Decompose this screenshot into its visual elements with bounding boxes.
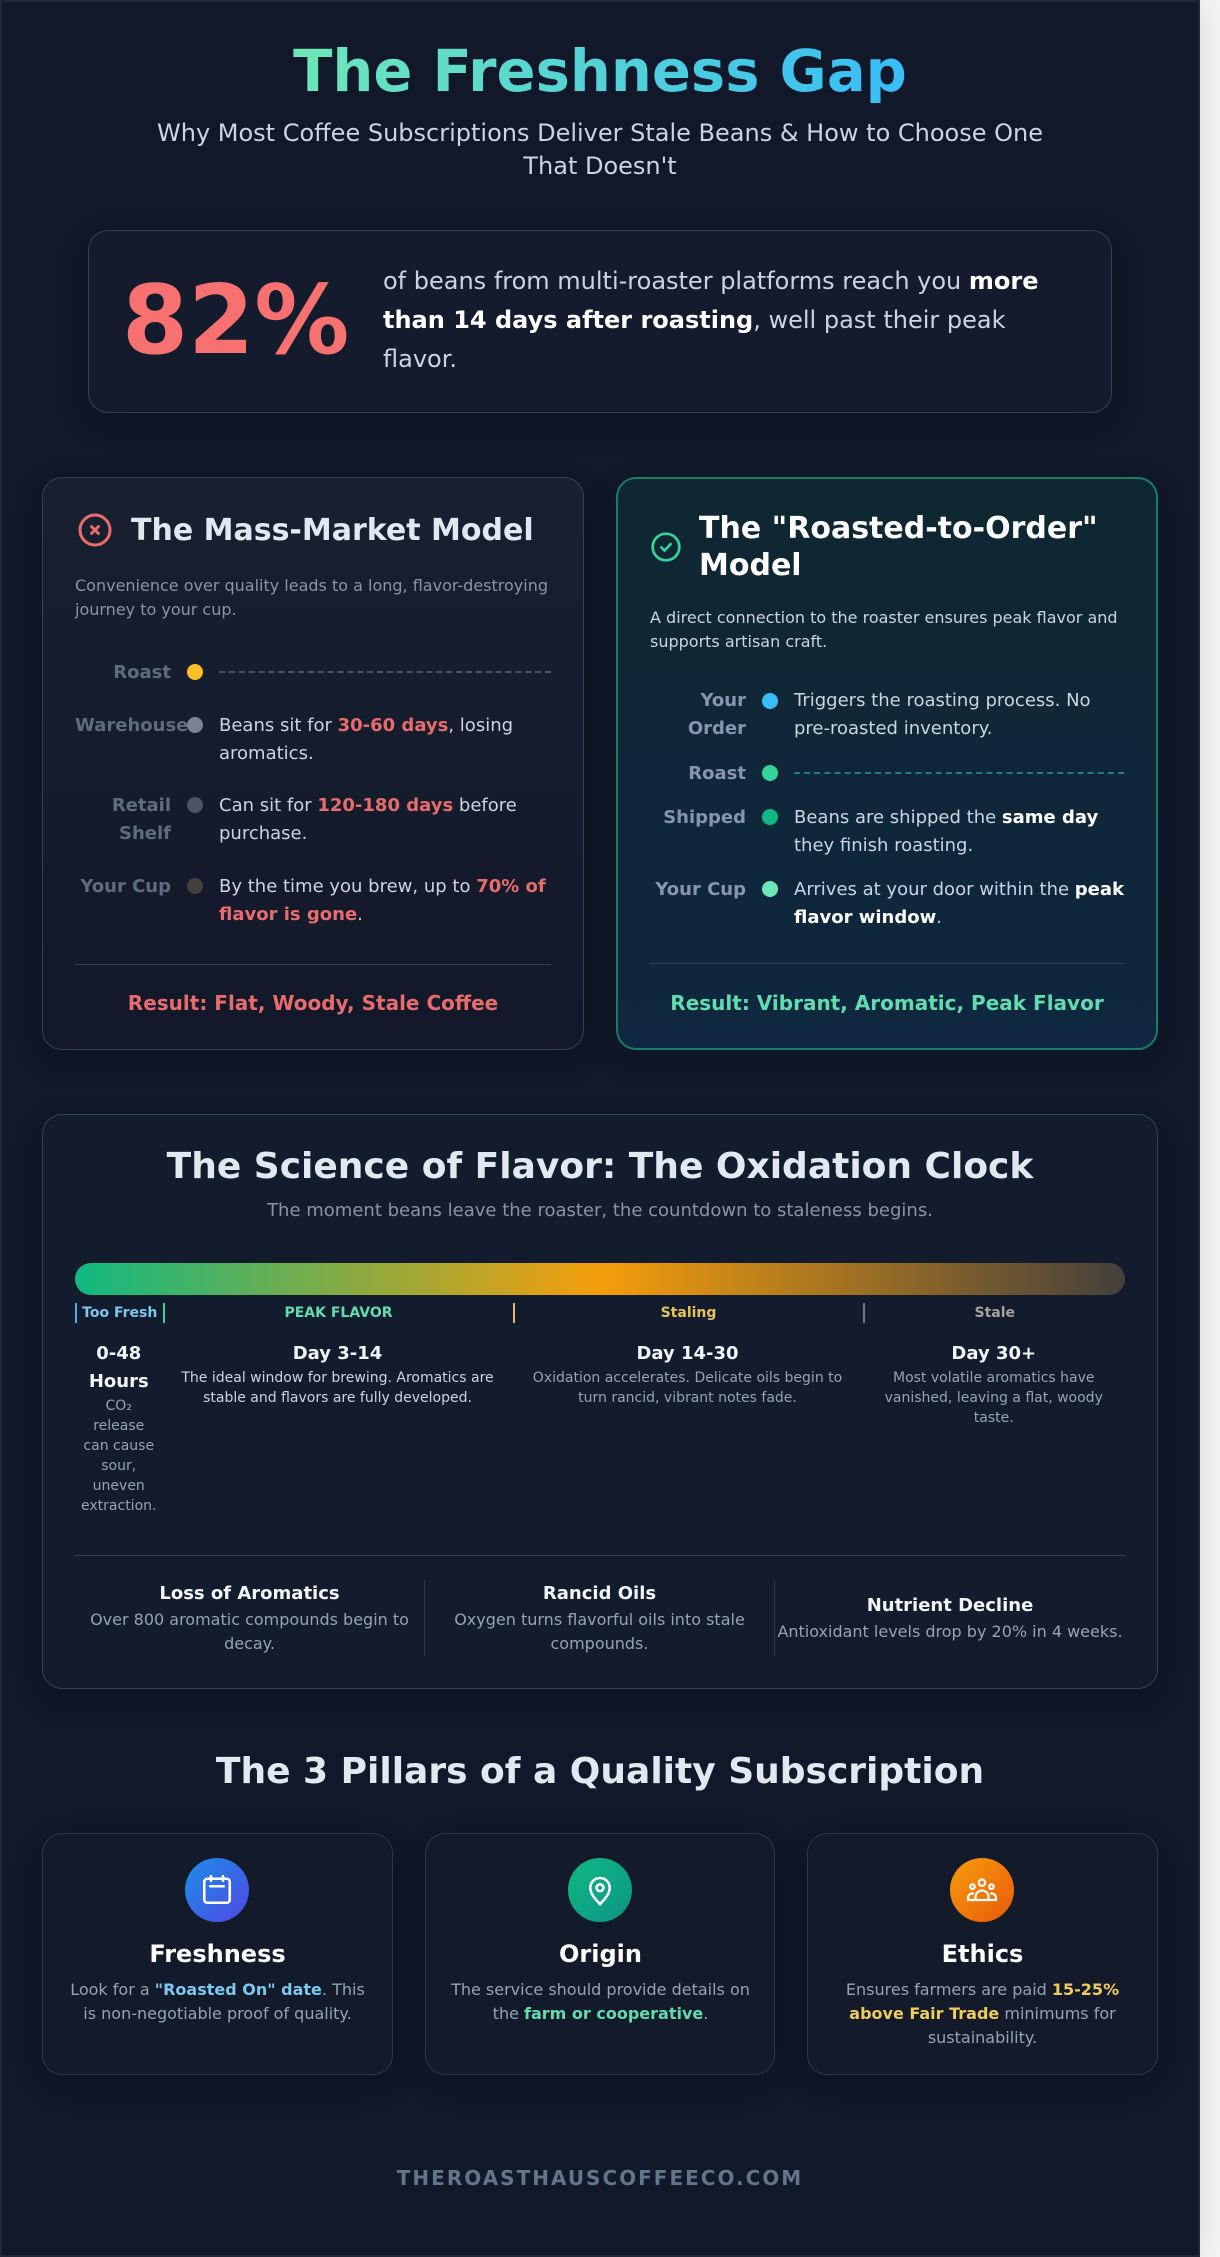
detail: 0-48 hours (81, 1343, 156, 1514)
heading: The Science of Flavor: The Oxidation Clock (167, 1146, 1033, 1187)
detail: day 14-30: Day 14-30 (636, 1343, 739, 1364)
timeline dot: your order (762, 693, 778, 709)
footer: THEROASTHAUSCOFFEECO.COM (397, 2166, 803, 2190)
icon: x circle (78, 514, 112, 546)
result: Result: Vibrant, Aromatic, Peak Flavor (670, 990, 1104, 1014)
stat: nutrient decline: Antioxidant levels drop by 20% in 4 weeks. (777, 1622, 1123, 1641)
timeline label: roast: Roast (688, 763, 746, 784)
detail: day 30+: Most volatile aromatics have vanished, leaving a flat, woody taste. (885, 1370, 1103, 1426)
timeline dot: shipped (762, 809, 778, 825)
timeline dot: roast (187, 664, 203, 680)
timeline label: retail shelf: Retail Shelf (112, 794, 171, 844)
detail: 0-48 hours: CO₂ release can cause sour, uneven extraction. (81, 1398, 156, 1514)
timeline text: your order: Triggers the roasting process. No pre‑roasted inventory. (794, 690, 1091, 739)
stat: nutrient decline: Nutrient Decline (867, 1595, 1033, 1616)
panel: key statistic (88, 230, 1112, 413)
icon: check circle (651, 532, 681, 562)
heading: The Mass-Market Model (131, 512, 534, 548)
stat: loss of aromatics: Loss of Aromatics (159, 1583, 340, 1604)
detail: day 30+: Day 30+ (951, 1343, 1036, 1364)
detail: day 14-30 (533, 1343, 842, 1406)
segment label: staling (512, 1303, 862, 1323)
pillar text: The service should provide details on the farm or cooperative. (451, 1980, 750, 2022)
panel: origin pillar (425, 1833, 775, 2075)
subtitle: Why Most Coffee Subscriptions Deliver Stale Beans & How to Choose One That Doesn't (157, 119, 1043, 180)
stat: loss of aromatics (75, 1580, 425, 1656)
stat: nutrient decline (777, 1595, 1123, 1641)
timeline label: shipped: Shipped (663, 807, 746, 828)
timeline label: roast: Roast (113, 662, 171, 683)
panel: freshness pillar (42, 1833, 393, 2075)
pillar text: Look for a "Roasted On" date. This is non-negotiable proof of quality. (70, 1980, 365, 2022)
timeline dot: roast (762, 765, 778, 781)
result: Result: Flat, Woody, Stale Coffee (128, 990, 498, 1014)
detail: day 3-14 (181, 1343, 494, 1406)
stat: rancid oils: Rancid Oils (543, 1583, 656, 1604)
panel: roasted-to-order model (616, 477, 1158, 1050)
timeline text: your cup: By the time you brew, up to 70% of flavor is gone. (219, 876, 546, 924)
timeline dot: your cup (187, 878, 203, 894)
detail: 0-48 hours: 0-48 Hours (89, 1343, 149, 1392)
detail: day 30+ (885, 1343, 1103, 1426)
description: A direct connection to the roaster ensures peak flavor and supports artisan craft. (650, 608, 1118, 651)
timeline text: retail shelf: Can sit for 120-180 days before purchase. (219, 794, 517, 844)
segment label: stale (862, 1303, 1125, 1323)
timeline dot: retail shelf (187, 796, 203, 812)
description: Convenience over quality leads to a long, flavor-destroying journey to your cup. (75, 576, 548, 619)
dashed line (219, 671, 551, 673)
panel: ethics pillar (807, 1833, 1158, 2075)
stat text: of beans from multi-roaster platforms reach you more than 14 days after roasting, well past their peak flavor. (383, 267, 1038, 373)
detail: day 14-30: Oxidation accelerates. Delicate oils begin to turn rancid, vibrant notes fade. (533, 1370, 842, 1406)
segment label: stale: Stale (974, 1305, 1015, 1321)
segment label: peak flavor (162, 1303, 512, 1323)
subheading: The moment beans leave the roaster, the countdown to staleness begins. (267, 1200, 933, 1220)
stat: rancid oils: Oxygen turns flavorful oils into stale compounds. (454, 1610, 745, 1653)
detail: day 3-14: The ideal window for brewing. Aromatics are stable and flavors are fully developed. (181, 1370, 494, 1406)
pillars heading: The 3 Pillars of a Quality Subscription (216, 1751, 984, 1792)
timeline text: your cup: Arrives at your door within the peak flavor window. (794, 879, 1124, 928)
heading: The "Roasted-to-Order" Model (699, 511, 1098, 583)
stat: loss of aromatics: Over 800 aromatic compounds begin to decay. (90, 1610, 409, 1653)
timeline dot: your cup (762, 881, 778, 897)
stat number: 82% (122, 266, 349, 376)
gradient timeline bar (75, 1263, 1125, 1295)
timeline text: shipped: Beans are shipped the same day they finish roasting. (794, 807, 1098, 856)
segment label: staling: Staling (661, 1305, 716, 1321)
timeline dot: warehouse (187, 716, 203, 732)
title: The Freshness Gap (293, 38, 907, 105)
icon: people group (950, 1858, 1014, 1922)
icon: map pin (568, 1858, 632, 1922)
segment label: peak flavor: PEAK FLAVOR (284, 1305, 393, 1321)
pillar text: Ensures farmers are paid 15-25% above Fair Trade minimums for sustainability. (846, 1980, 1119, 2046)
panel: science of flavor (42, 1114, 1158, 1689)
stat: rancid oils (425, 1580, 775, 1656)
timeline label: your cup: Your Cup (655, 879, 746, 900)
pillar title: Ethics (942, 1940, 1023, 1968)
timeline label: your order: Your Order (688, 690, 746, 739)
timeline text: warehouse: Beans sit for 30-60 days, losing aromatics. (219, 714, 513, 764)
segment label: too fresh (75, 1303, 162, 1323)
detail: day 3-14: Day 3-14 (293, 1343, 382, 1364)
pillar title: Freshness (149, 1940, 286, 1968)
icon: calendar (185, 1858, 249, 1922)
segment label: too fresh: Too Fresh (82, 1305, 157, 1321)
dashed line (794, 772, 1124, 774)
pillar title: Origin (559, 1940, 642, 1968)
panel: mass-market model (42, 477, 584, 1050)
timeline label: warehouse: Warehouse (75, 714, 188, 736)
timeline label: your cup: Your Cup (80, 876, 171, 896)
